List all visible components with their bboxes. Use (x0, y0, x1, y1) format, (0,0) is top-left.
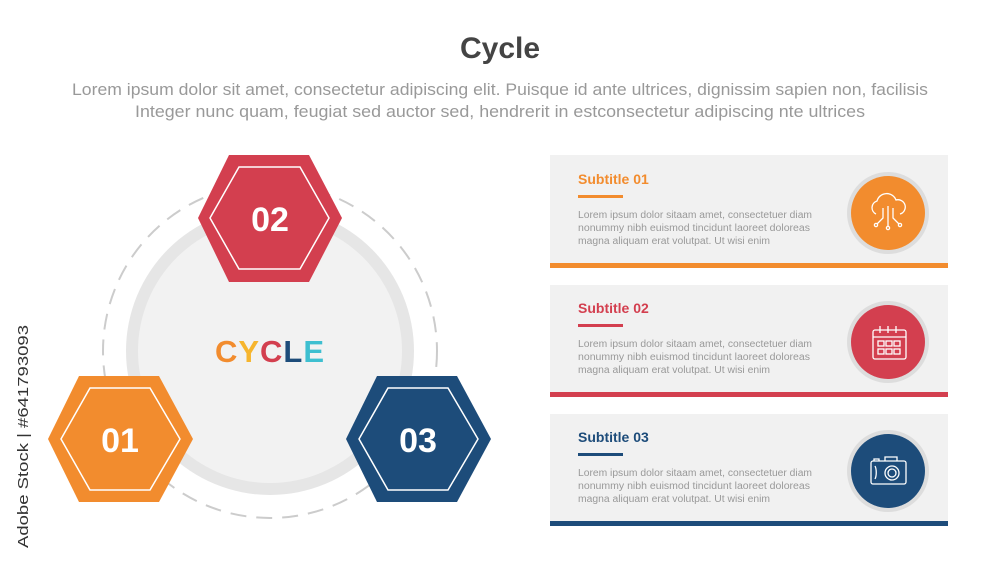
icon: calendar (847, 301, 929, 383)
hexagon 02 (198, 155, 342, 282)
hexagon 03: 03 (399, 422, 437, 460)
card 01: Subtitle 01 (578, 171, 649, 187)
card 02 (550, 285, 948, 397)
center label: CYCLE: CYCLE (215, 334, 325, 369)
hexagon 02: 02 (251, 201, 289, 239)
cycle diagram (48, 155, 491, 518)
description text (72, 80, 928, 121)
card 03: Lorem ipsum dolor sitaam amet, consectetuer diam (578, 468, 812, 479)
card 03: nonummy nibh euismod tincidunt laoreet doloreas (578, 481, 810, 492)
icon: cloud network (847, 172, 929, 254)
card 01: Lorem ipsum dolor sitaam amet, consectetuer diam (578, 210, 812, 221)
hexagon 03 (346, 376, 491, 502)
card 02: magna aliquam erat volutpat. Ut wisi enim (578, 365, 770, 376)
card 03: Subtitle 03 (578, 429, 649, 445)
card 01 (550, 155, 948, 268)
card 02: Subtitle 02 (578, 300, 649, 316)
hexagon 01 (48, 376, 193, 502)
card 02: Lorem ipsum dolor sitaam amet, consectetuer diam (578, 339, 812, 350)
card 01: nonummy nibh euismod tincidunt laoreet doloreas (578, 223, 810, 234)
card 03 (550, 414, 948, 526)
card 03: magna aliquam erat volutpat. Ut wisi enim (578, 494, 770, 505)
description text: Integer nunc quam, feugiat sed auctor sed, hendrerit in estconsectetur adipiscing nte ultrices (135, 102, 865, 121)
title: Cycle (460, 32, 540, 65)
hexagon 01: 01 (101, 422, 139, 460)
description text: Lorem ipsum dolor sit amet, consectetur adipiscing elit. Puisque id ante ultrices, dignissim sapien non, facilisis (72, 80, 928, 99)
vertical stock label: Adobe Stock | #641793093 (15, 325, 32, 548)
card 01: magna aliquam erat volutpat. Ut wisi enim (578, 236, 770, 247)
icon: camera (847, 430, 929, 512)
card 02: nonummy nibh euismod tincidunt laoreet doloreas (578, 352, 810, 363)
